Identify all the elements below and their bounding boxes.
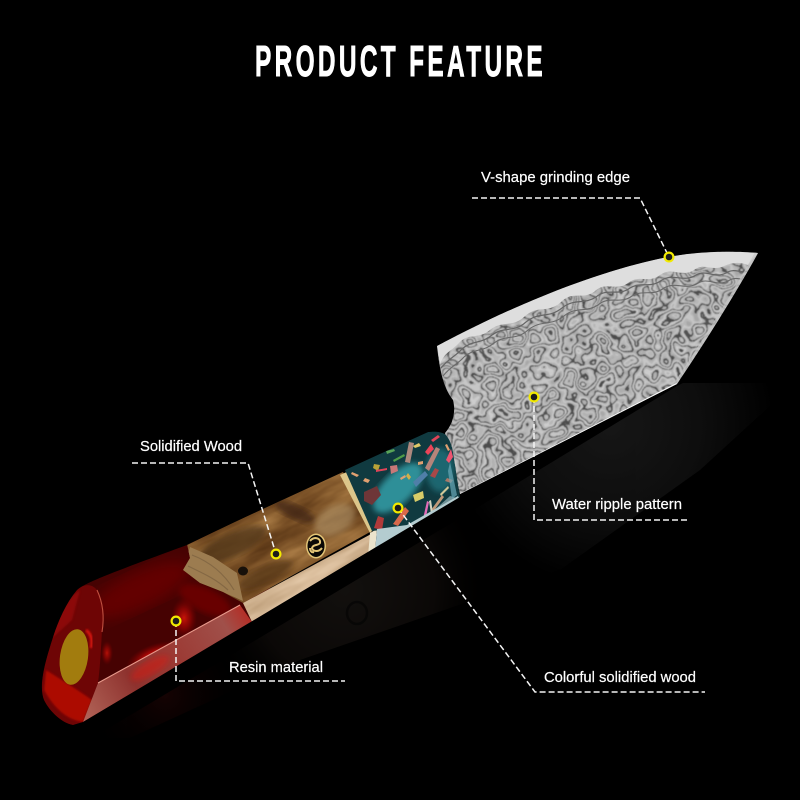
- light wood facet: [243, 534, 370, 622]
- blade bright edge: [460, 384, 677, 495]
- callout: V-shape grinding edge: V-shape grinding edge: [481, 169, 630, 186]
- facet red glow: [130, 654, 170, 682]
- hamon lines: [441, 270, 750, 368]
- callout: V-shape grinding edge: [472, 169, 673, 261]
- wood section: [183, 472, 374, 603]
- reflection on the floor: [138, 383, 731, 725]
- callout: resin material: Resin material: [229, 659, 323, 676]
- butt end face: [42, 585, 103, 725]
- medallion: [306, 534, 326, 558]
- callout: water ripple pattern: [530, 393, 690, 520]
- wood left lump: [183, 547, 243, 601]
- callout: solidified wood: Solidified Wood: [140, 438, 242, 455]
- callout: colorful solidified wood: [394, 504, 705, 692]
- colorful section: [345, 432, 460, 531]
- gold band: [340, 471, 377, 556]
- red resin section: [42, 530, 270, 725]
- knife handle: [42, 432, 460, 725]
- resin facet highlight: [98, 605, 240, 683]
- gold cap: [60, 629, 88, 685]
- knife blade: [430, 245, 765, 500]
- callout: colorful solidified wood: Colorful solidified wood: [544, 669, 696, 686]
- callout: resin material: [172, 617, 345, 681]
- knot: [238, 566, 248, 576]
- wood dark grain: [199, 522, 269, 564]
- blade bevel: [437, 252, 758, 364]
- colorful lower strip: [375, 496, 460, 552]
- title: PRODUCT FEATURE: [255, 37, 546, 86]
- callout: water ripple pattern: Water ripple pattern: [552, 496, 682, 513]
- marker: [172, 617, 180, 625]
- callout: solidified wood: [132, 438, 280, 558]
- marker: [530, 393, 538, 401]
- marker: [272, 550, 280, 558]
- wood light grain: [313, 502, 358, 538]
- marker: [665, 253, 673, 261]
- marker: [394, 504, 402, 512]
- resin lower facet: [83, 605, 252, 722]
